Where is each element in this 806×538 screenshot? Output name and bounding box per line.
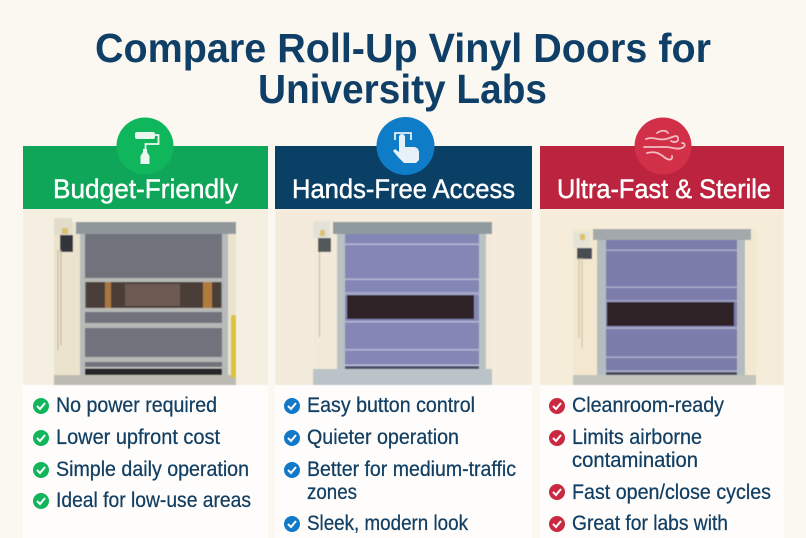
item: better for medium-traffic zones: zones xyxy=(307,481,357,504)
item: no power required: No power required xyxy=(56,394,217,417)
item: great for labs with: Great for labs with xyxy=(572,512,728,535)
door photo: budget-friendly xyxy=(23,209,268,385)
item: lower upfront cost: Lower upfront cost xyxy=(56,426,220,449)
panel background xyxy=(540,209,784,538)
panel: hands-free access xyxy=(275,117,532,538)
item: easy button control: Easy button control xyxy=(307,394,475,417)
item: limits airborne contamination: contamination xyxy=(572,449,698,472)
checklist: budget-friendly xyxy=(33,394,251,512)
icon: touch hand xyxy=(376,117,434,175)
title: University Labs xyxy=(258,66,547,112)
header band xyxy=(275,146,532,209)
icon: air flow xyxy=(634,118,692,174)
heading: hands-free access: Hands-Free Access xyxy=(292,174,515,204)
item: ideal for low-use areas: Ideal for low-use areas xyxy=(56,489,251,512)
checklist: ultra-fast and sterile xyxy=(549,394,771,535)
item: fast open/close cycles: Fast open/close cycles xyxy=(572,481,771,504)
door photo: hands-free access xyxy=(275,209,532,385)
panel: ultra-fast and sterile xyxy=(540,118,784,538)
item: limits airborne contamination: Limits airborne xyxy=(572,426,702,449)
item: sleek modern look: Sleek, modern look xyxy=(307,512,468,535)
icon: paint roller xyxy=(116,118,174,174)
item: limits airborne contamination xyxy=(549,426,702,472)
panel: budget-friendly xyxy=(23,118,268,538)
item: cleanroom-ready: Cleanroom-ready xyxy=(572,394,724,417)
item: better for medium-traffic zones xyxy=(284,458,516,504)
item: simple daily operation: Simple daily operation xyxy=(56,458,249,481)
item: quieter operation: Quieter operation xyxy=(307,426,459,449)
checklist: hands-free access xyxy=(284,394,516,535)
title: Compare Roll-Up Vinyl Doors for xyxy=(95,25,711,71)
header band xyxy=(23,146,268,209)
panel background xyxy=(23,209,268,538)
title xyxy=(95,25,711,112)
panel background xyxy=(275,209,532,538)
header band xyxy=(540,146,784,209)
door photo: ultra-fast and sterile xyxy=(540,209,784,385)
item: better for medium-traffic zones: Better for medium-traffic xyxy=(307,458,516,481)
heading: ultra-fast and sterile: Ultra-Fast & Sterile xyxy=(557,174,771,204)
heading: budget-friendly: Budget-Friendly xyxy=(53,174,238,204)
